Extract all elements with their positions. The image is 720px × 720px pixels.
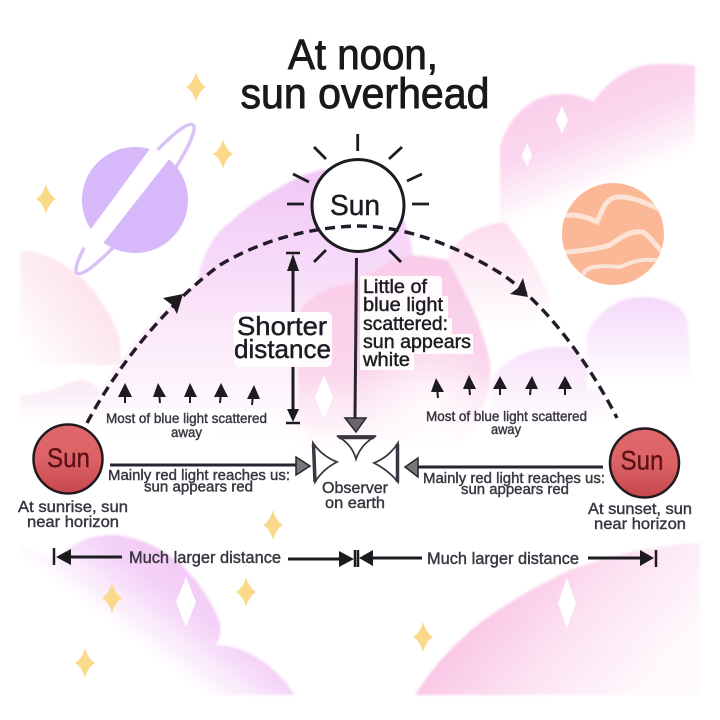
gold stars <box>36 72 433 678</box>
arrow: red light from sunset <box>405 458 603 477</box>
title: sun overhead <box>240 70 490 118</box>
caption: red light right: Mainly red light reaches us: <box>423 471 605 487</box>
arrowhead: rising sun path <box>163 294 183 314</box>
sunrise sun <box>34 424 102 494</box>
caption: sunrise: At sunrise, sun <box>18 499 128 516</box>
caption: sunset <box>588 501 692 533</box>
label: little blue light scattered <box>360 276 473 371</box>
dashed sun path arc <box>87 226 617 423</box>
caption: blue light scattered left <box>104 410 272 440</box>
label: observer on earth <box>322 480 389 512</box>
arrowhead: setting sun path <box>510 278 528 297</box>
caption: sunset: At sunset, sun <box>588 501 692 518</box>
label: shorter distance: Shorter <box>237 311 327 341</box>
small up arrows left <box>118 383 260 405</box>
noon sun with rays: Sun <box>330 190 380 222</box>
label: observer on earth: on earth <box>325 495 385 512</box>
caption: blue light scattered left: away <box>171 424 202 440</box>
caption: red light left: Mainly red light reaches us: <box>108 468 290 484</box>
caption: sunrise <box>18 499 128 531</box>
label: shorter distance <box>234 311 332 367</box>
label: little blue light scattered: scattered: <box>363 313 448 335</box>
caption: blue light scattered left: Most of blue light scattered <box>106 410 267 426</box>
icon: observer eyes <box>313 436 398 482</box>
caption: red light right <box>423 471 605 498</box>
sunrise sun: Sun <box>47 443 90 473</box>
sunset sun: Sun <box>620 446 664 476</box>
white sparkles <box>176 106 576 628</box>
label: observer on earth: Observer <box>322 480 389 497</box>
caption: blue light scattered right: Most of blue light scattered <box>426 408 587 424</box>
label: shorter distance: distance <box>234 334 331 364</box>
caption: sunrise: near horizon <box>27 514 119 531</box>
distance arrow left <box>54 548 355 567</box>
caption: red light right: sun appears red <box>461 482 569 498</box>
title: At noon, <box>288 31 438 79</box>
label: little blue light scattered: Little of <box>363 276 428 298</box>
caption: blue light scattered right <box>426 408 587 437</box>
caption: sunset: near horizon <box>594 516 686 533</box>
arrow: shorter distance <box>286 253 300 423</box>
caption: blue light scattered right: away <box>491 421 521 437</box>
label: little blue light scattered: sun appears <box>363 331 471 353</box>
label: little blue light scattered: white <box>362 349 410 371</box>
distance arrow right <box>358 550 656 568</box>
distance arrow right: Much larger distance <box>427 550 579 568</box>
title <box>240 31 490 118</box>
caption: red light left <box>108 468 290 496</box>
label: little blue light scattered: blue light <box>363 294 444 316</box>
icon: orange striped planet <box>560 183 665 285</box>
caption: red light left: sun appears red <box>144 480 253 496</box>
icon: purple ringed planet <box>65 116 205 282</box>
distance arrow left: Much larger distance <box>129 549 281 567</box>
sunset sun <box>610 428 679 498</box>
arrow: red light from sunrise <box>110 457 310 475</box>
arrow: noon light to observer <box>345 258 366 432</box>
small up arrows right <box>431 375 572 398</box>
noon sun with rays <box>287 134 429 262</box>
